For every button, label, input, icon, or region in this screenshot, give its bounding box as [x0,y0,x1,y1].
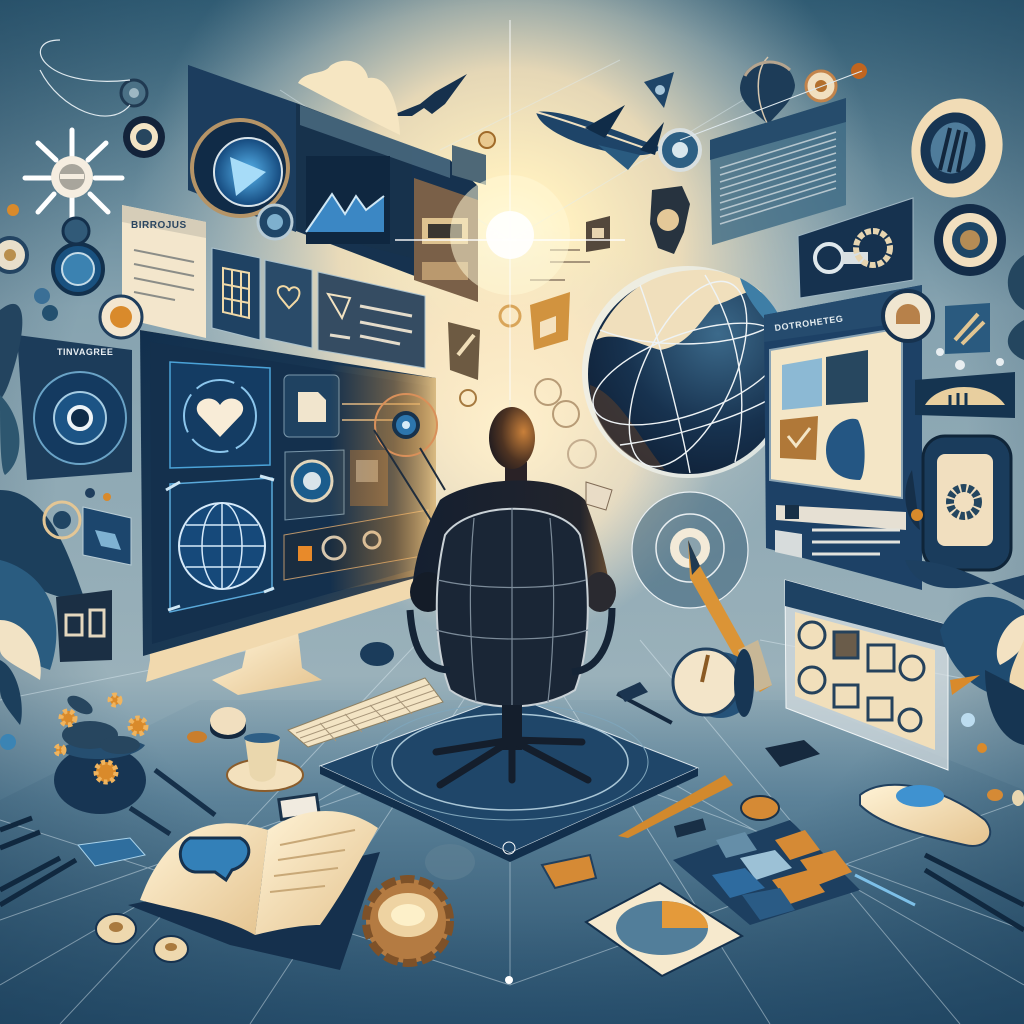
icon: striped coin [898,86,1016,210]
monitor stand [212,632,322,695]
panel: striped window [710,98,846,245]
sun glow [395,20,625,400]
right floor tools [925,789,1024,930]
small floating icons center [448,132,690,510]
icon: glowing sun gear [25,130,122,226]
computer mouse [860,785,990,846]
coffee cup [227,733,319,819]
small gold coins [96,914,188,962]
globe [580,264,796,484]
icons: right column [883,255,1024,570]
card: document tile [284,375,420,437]
pie chart card [586,883,742,976]
left floor tools [0,734,215,905]
desk items: pucks [187,642,394,743]
chair arms [410,608,612,672]
keyboard [288,678,443,747]
icon: target on stand [632,492,748,608]
chair back [436,508,588,708]
icon: pointer lens [374,394,445,528]
flower vase [54,692,146,814]
panel: top video window [188,65,478,302]
panel: middle row of cards [212,248,425,368]
gear medallion [366,879,450,963]
icon: airplane [536,105,664,170]
panel: document BIRROJUS [122,205,206,338]
panel: document BIRROJUS: BIRROJUS [131,220,187,231]
icon: cloud [298,61,400,135]
pencil on floor [616,682,820,838]
office chair and person [410,407,616,785]
icon: ring right [934,204,1006,276]
icon: hot air balloon [740,57,795,125]
plant: left leaves [0,304,85,725]
panel: large monitor [140,330,436,695]
icon: gauge [673,649,754,718]
side tiles [422,218,468,280]
panel: TINVAGREE: TINVAGREE [57,347,113,357]
center floor items [425,842,596,984]
card: globe target [166,476,274,612]
icon: play button dial [192,120,292,239]
chart: mountain area chart [306,156,390,244]
icons: top-left rings [40,40,165,158]
panel: DOTROHETEG app window: DOTROHETEG [774,313,844,333]
plant: right flowers [905,560,1024,753]
icons: left column badges [0,204,142,338]
card: heart [170,362,270,468]
person head [489,407,535,482]
icon: pencil [688,540,772,692]
panel: DOTROHETEG app window [764,285,922,590]
person shoulders and arms [410,480,616,612]
blocks tray [673,820,915,925]
panel: TINVAGREE [17,335,132,480]
chair base [436,705,588,785]
panel: lower right buttons window [785,580,948,770]
open book [128,811,380,970]
card: controls strip [284,510,428,580]
panel: gear key card [798,198,913,298]
card: person badge [285,450,388,520]
icon: bird silhouette [390,74,467,116]
floor pad [320,695,698,862]
icons: top right misc [644,63,867,170]
icon: small tiles left [44,488,131,662]
